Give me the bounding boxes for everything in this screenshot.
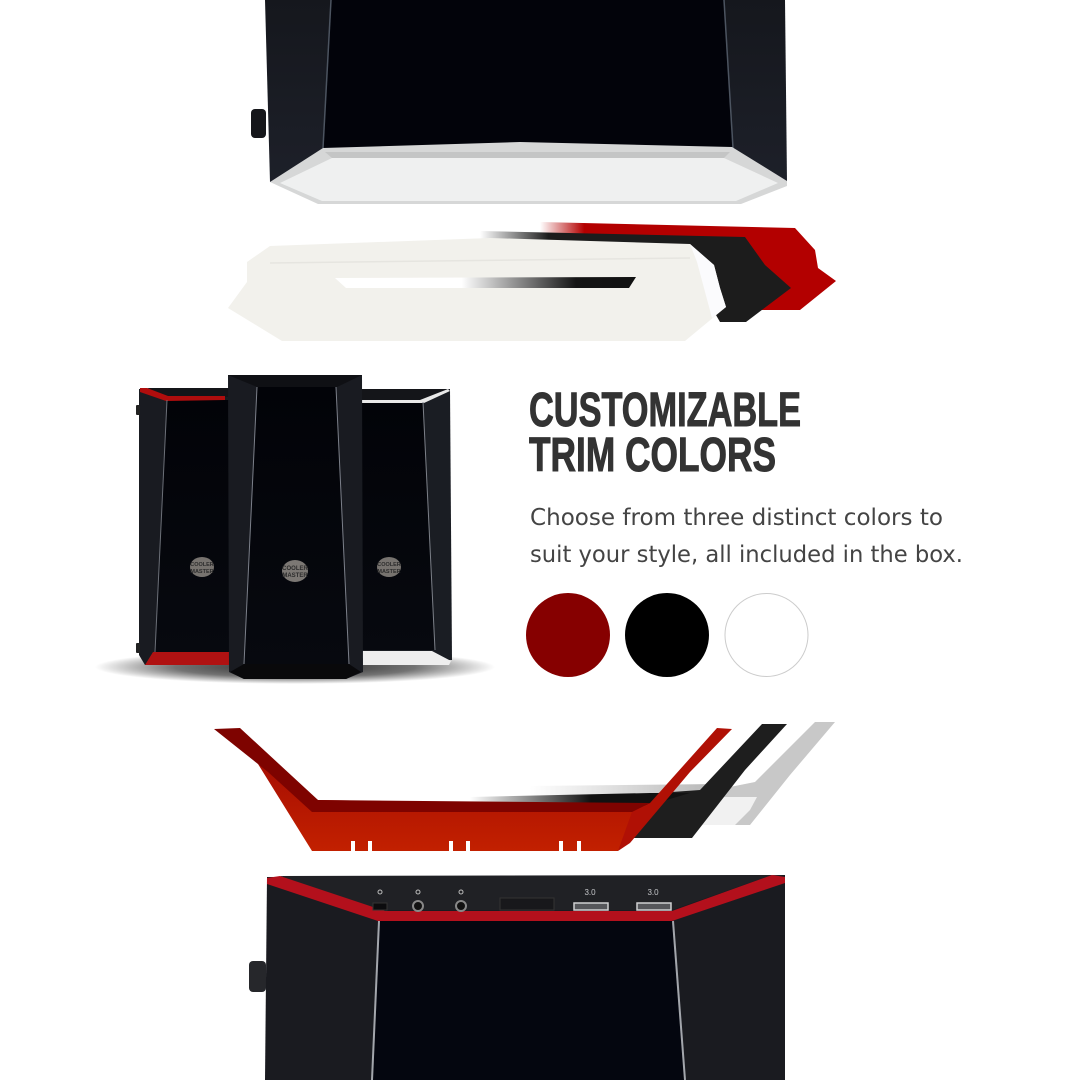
center case logo: MASTER [282,573,308,579]
icon: top case knob [251,109,266,138]
icon: left case knobs [136,405,140,653]
bottom case body [265,875,785,1080]
bottom case top panel [280,875,772,910]
swatch: white [725,594,808,676]
black trim piece [480,231,791,322]
right case logo [377,557,401,577]
fading grey strip [530,784,720,796]
icon: bottom case knob [249,961,266,992]
red trim piece [258,764,645,851]
right case [360,389,452,665]
heading [529,384,801,482]
colour swatches [526,593,808,677]
swatch: red [526,593,610,677]
white trim highlight [690,244,726,318]
left case top bar [147,388,232,397]
body text [530,505,963,568]
heading: CUSTOMIZABLE [529,384,801,437]
white trim piece [228,238,726,341]
left case red bottom trim [145,652,232,665]
body text: Choose from three distinct colors to [530,505,943,531]
black trim piece [630,724,787,838]
red trim piece [540,222,836,310]
center case [228,375,363,679]
center case top bar [228,375,362,387]
floor shadow [95,650,495,684]
detached lower trims [214,722,835,851]
right case top bar [360,389,448,400]
top case glass panel [323,0,733,148]
trim notches [351,841,581,851]
center case glass [244,387,349,664]
icons: usb ports [574,903,671,910]
left case logo: MASTER [190,569,214,575]
center case logo: COOLER [282,566,308,572]
fading strip behind red trim [470,793,690,805]
red top trim [267,875,785,921]
right case logo: MASTER [377,569,401,575]
top case body [265,0,787,182]
detached trims: white black red [228,222,836,341]
top case panel edge lines [323,0,733,148]
right case white bottom trim [360,651,451,665]
bottom case glass [373,921,684,1080]
bottom case with red trim [249,875,785,1080]
port labels: 3.0 [647,888,659,897]
left case red top trim [140,388,225,401]
right case logo: COOLER [377,562,401,568]
heading: TRIM COLORS [529,429,776,482]
body text: suit your style, all included in the box. [530,542,963,568]
right case white top trim [362,389,450,403]
left case logo [190,557,214,577]
trim slot opening [335,277,636,288]
center case logo [282,560,308,582]
three cases group [95,375,495,684]
right case glass [360,402,435,650]
red trim right arm [618,728,732,851]
top case with white trim [251,0,787,204]
port labels: 3.0 [584,888,596,897]
left case glass [155,400,232,652]
port labels [584,888,659,897]
left case logo: COOLER [190,562,214,568]
white trim outer [270,142,787,204]
white trim inner [280,158,778,201]
icons: audio ports [373,890,466,911]
grey trim piece [700,722,835,825]
icon: power button [500,898,554,910]
red trim inner face [214,728,650,812]
white trim crease [270,258,690,263]
grey trim front face [700,797,757,825]
swatch: black [625,593,709,677]
left case [136,388,232,665]
center case bottom edge [230,664,361,679]
white trim band line [325,152,730,158]
